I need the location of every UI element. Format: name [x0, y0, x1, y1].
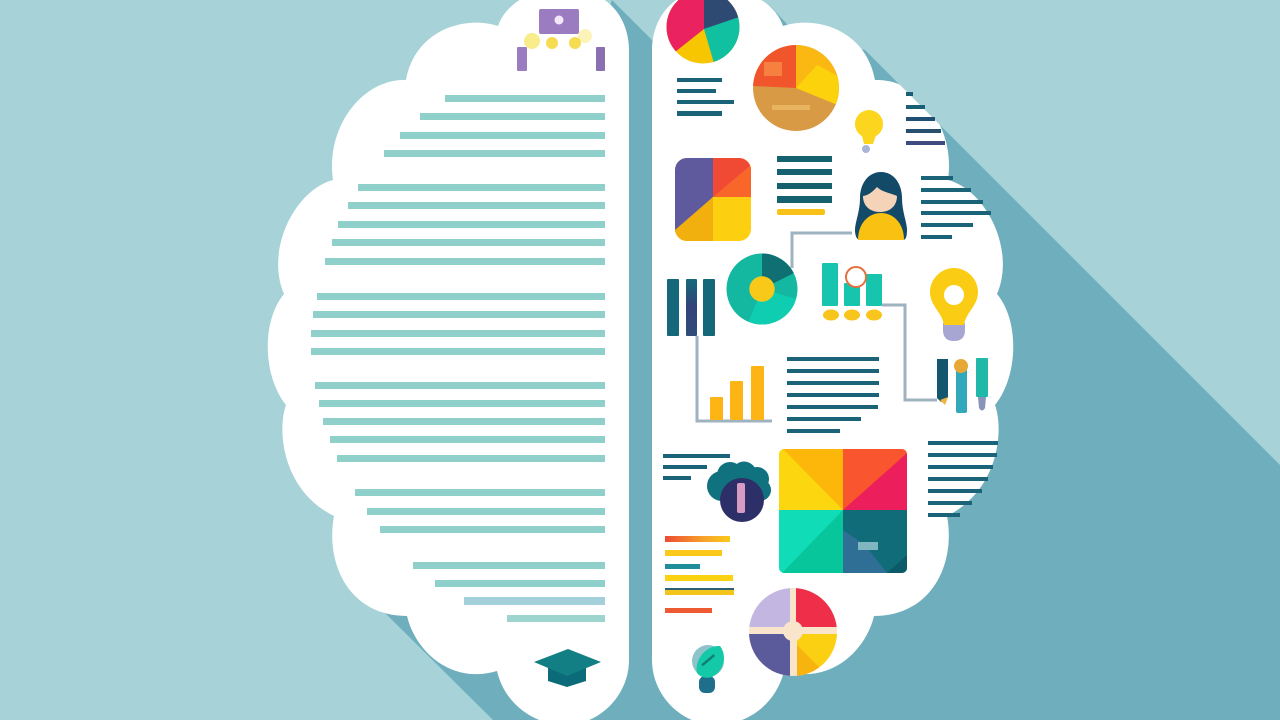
- donut chart: [726, 254, 798, 324]
- text lines: top: [677, 78, 734, 116]
- text lines: right of person: [921, 176, 991, 239]
- icon: pencils: [937, 358, 988, 413]
- text lines: right of square: [928, 441, 998, 517]
- pie chart: four quadrants: [749, 588, 837, 676]
- icon: small teal bulb: [692, 645, 724, 693]
- text lines: top right: [906, 92, 945, 145]
- text lines: coloured: [665, 536, 734, 613]
- bar chart: orange: [710, 366, 764, 420]
- icon: graduation cap: [534, 649, 601, 687]
- left hemisphere: [268, 0, 629, 720]
- background wedge cutting the right hemisphere: [893, 78, 950, 130]
- right hemisphere: [652, 0, 1013, 720]
- left hemisphere text lines: [311, 95, 605, 622]
- bars: dark teal: [667, 279, 715, 336]
- bar chart: teal with marker: [822, 263, 882, 320]
- colour block: rounded square: [675, 158, 751, 241]
- text lines: middle block: [777, 156, 832, 215]
- text lines: centre: [787, 357, 879, 433]
- pie chart: orange: [753, 45, 839, 131]
- icon: large light bulb: [930, 268, 978, 341]
- icon: small light bulb: [855, 110, 883, 153]
- icon: purple presentation board: [517, 9, 605, 71]
- brain infographic: [268, 0, 1280, 720]
- long diagonal shadow: [377, 0, 1280, 720]
- text lines: small top left of square: [663, 454, 730, 480]
- pie chart: top: [666, 0, 740, 64]
- colour block: large square: [779, 449, 907, 573]
- icon: teal brain head: [707, 462, 771, 522]
- connector lines: [697, 233, 937, 421]
- icon: person: [855, 172, 907, 240]
